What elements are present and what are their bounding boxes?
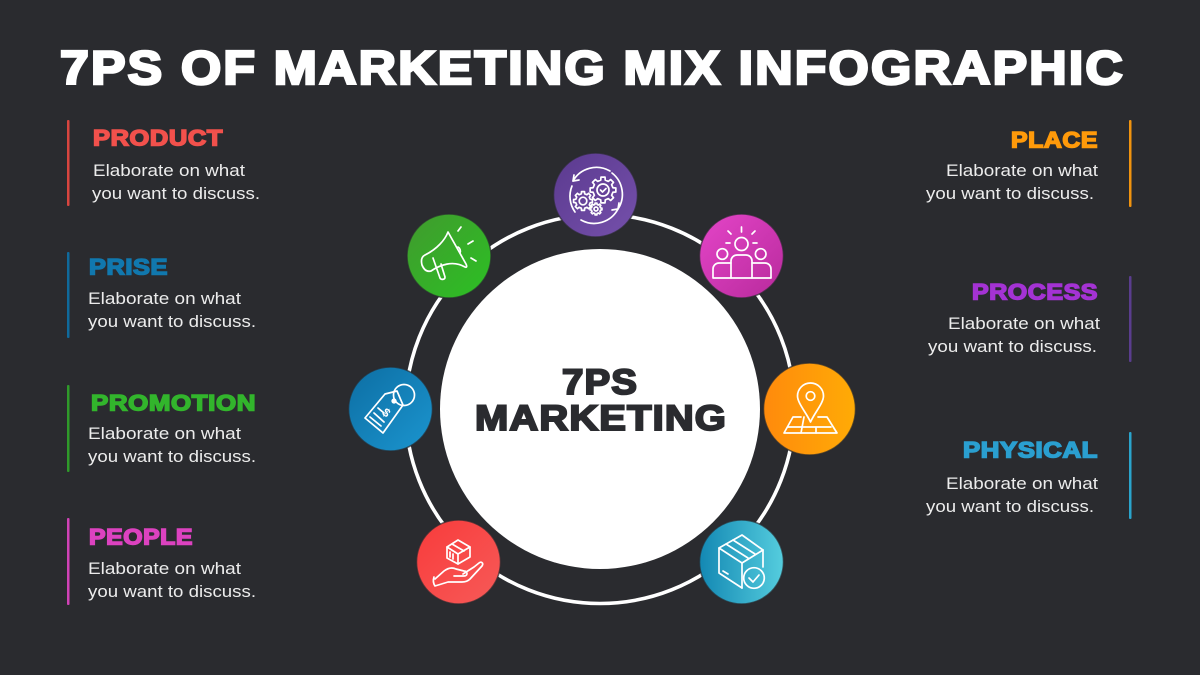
text: place body [926,161,1098,203]
text: physical body: you want to discuss. [926,497,1094,516]
text: product body: Elaborate on what [93,161,245,180]
panel: product [67,120,260,206]
heading: people: PEOPLE [89,524,193,550]
outer ring [406,214,794,604]
panel: promotion [67,385,256,472]
icon: megaphone [407,214,491,298]
heading: place: PLACE [1011,128,1098,152]
icon: process gears [554,153,638,237]
text: process body: you want to discuss. [928,337,1097,356]
text: product body: you want to discuss. [92,184,260,203]
icon: price tag [348,367,432,451]
heading: physical: PHYSICAL [963,438,1098,462]
text: prise body: you want to discuss. [88,312,256,331]
text: prise body: Elaborate on what [88,289,241,308]
icon: map pin [764,363,856,455]
heading: process: PROCESS [972,280,1098,304]
panel: physical [926,432,1132,519]
icon: hand holding product [416,520,500,604]
icon: people group [700,214,784,298]
text: process body [928,314,1100,356]
text: physical body [926,474,1098,516]
icon: verified box [700,520,784,604]
center label: 7PS [562,363,638,402]
text: product body [92,161,260,203]
text: physical body: Elaborate on what [946,474,1098,493]
center circle [440,249,760,569]
text: prise body [88,289,256,331]
panel: people [67,518,256,605]
title: 7PS OF MARKETING MIX INFOGRAPHIC [60,41,1125,94]
center label [475,363,727,438]
text: place body: you want to discuss. [926,184,1094,203]
panel: place [926,120,1132,207]
icon glyph: dollar: $ [379,405,394,420]
text: people body [88,559,256,601]
text: people body: you want to discuss. [88,582,256,601]
heading: promotion: PROMOTION [91,390,256,416]
text: promotion body: you want to discuss. [88,447,256,466]
text: people body: Elaborate on what [88,559,241,578]
text: promotion body [88,424,256,466]
text: process body: Elaborate on what [948,314,1100,333]
text: promotion body: Elaborate on what [88,424,241,443]
heading: prise: PRISE [89,254,168,280]
panel: prise [67,252,256,338]
center label: MARKETING [475,399,727,438]
text: place body: Elaborate on what [946,161,1098,180]
panel: process [928,276,1132,362]
heading: product: PRODUCT [93,126,223,150]
